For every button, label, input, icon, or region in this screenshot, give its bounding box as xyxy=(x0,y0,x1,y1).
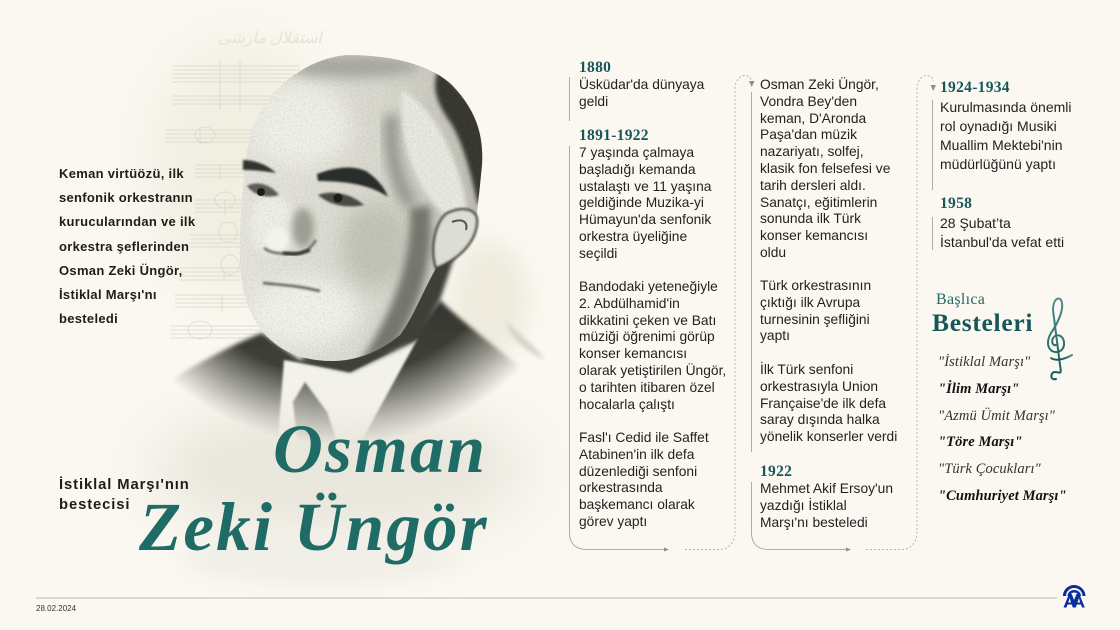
text: column 2 paragraph 1: sonunda ilk Türk xyxy=(760,211,861,226)
cheek shadow xyxy=(355,205,431,370)
suit xyxy=(176,298,518,439)
text: column 2 paragraph 3: saray dışında halka xyxy=(760,412,880,427)
text: column 2 paragraph 3: İlk Türk senfoni xyxy=(760,362,853,377)
text: 1958: İstanbul'da vefat etti xyxy=(940,234,1064,250)
intro text: orkestra şeflerinden xyxy=(59,239,189,254)
subtitle: İstiklal Marşı'nın xyxy=(59,477,190,493)
list of compositions: "İstiklal Marşı" xyxy=(938,354,1030,370)
timeline rules xyxy=(570,76,934,550)
nose xyxy=(292,208,314,248)
text: column 2 paragraph 1: Sanatçı, eğitimlerin xyxy=(760,195,877,210)
list of compositions: "Cumhuriyet Marşı" xyxy=(938,488,1067,504)
text: 1891-1922 paragraph 3: görev yaptı xyxy=(579,514,647,529)
text: column 2 paragraph 1 xyxy=(760,77,890,260)
text: column 2 paragraph 2 xyxy=(760,278,871,343)
list of compositions xyxy=(938,354,1067,504)
right eye xyxy=(318,193,364,206)
text: 1924-1934: Kurulmasında önemli xyxy=(940,99,1072,115)
list of compositions: "Türk Çocukları" xyxy=(938,461,1041,477)
text: 1880: Üsküdar'da dünyaya xyxy=(579,77,704,92)
text: column 2 paragraph 1: oldu xyxy=(760,245,786,260)
portrait figure xyxy=(176,55,518,441)
text: 1891-1922 paragraph 2: 2. Abdülhamid'in xyxy=(579,296,680,311)
text: 1880: geldi xyxy=(579,94,608,109)
intro text: kurucularından ve ilk xyxy=(59,214,195,229)
faded manuscript heading: اﺳﺘﻘﻼل ﻣﺎرﺷﻰ xyxy=(218,30,323,47)
text: 1924-1934: müdürlüğünü yaptı xyxy=(940,156,1056,172)
text: 1891-1922 paragraph 1 xyxy=(579,145,712,261)
date: 28.02.2024 xyxy=(36,604,76,613)
text: column 2 paragraph 1: nazariyatı, solfej, xyxy=(760,144,864,159)
dark hair xyxy=(435,70,490,205)
treble clef xyxy=(1048,298,1072,379)
year 1891-1922: 1891-1922 xyxy=(579,127,649,144)
text: 1891-1922 paragraph 2 xyxy=(579,279,726,412)
footer rule xyxy=(36,597,1057,599)
text: column 2 paragraph 1: konser kemancısı xyxy=(760,228,868,243)
face highlights xyxy=(250,83,350,167)
text: 1891-1922 paragraph 2: hocalarla çalıştı xyxy=(579,397,675,412)
text: column 2 paragraph 1: tarih dersleri aldı. xyxy=(760,178,866,193)
text: 1891-1922 paragraph 3: Fasl'ı Cedid ile Saffet xyxy=(579,430,709,445)
text: 1958: 28 Şubat’ta xyxy=(940,215,1011,231)
text: 1891-1922 paragraph 1: orkestra üyeliğine xyxy=(579,229,687,244)
text: 1891-1922 paragraph 1: Hümayun'da senfonik xyxy=(579,212,711,227)
text: 1891-1922 paragraph 2: Bandodaki yeteneğiyle xyxy=(579,279,718,294)
text: column 2 paragraph 3: orkestrasıyla Union xyxy=(760,379,878,394)
subtitle: bestecisi xyxy=(59,496,130,512)
text: 1891-1922 paragraph 2: müziği öğrenimi görüp xyxy=(579,329,715,344)
year 1958: 1958 xyxy=(940,195,972,212)
text: 1891-1922 paragraph 1: ustalaştı ve 11 yaşına xyxy=(579,179,711,194)
year 1880: 1880 xyxy=(579,59,611,76)
subtitle xyxy=(59,476,190,512)
text: 1958 xyxy=(940,215,1064,250)
shirt collar xyxy=(277,338,418,450)
right side smoke xyxy=(505,320,545,360)
list of compositions: "Azmü Ümit Marşı" xyxy=(938,408,1055,424)
AA logo xyxy=(1063,585,1086,608)
text: column 2 paragraph 1: Paşa'dan müzik xyxy=(760,127,857,142)
text: 1891-1922 paragraph 2: o tarihten itibaren özel xyxy=(579,380,715,395)
text: 1922: Marşı'nı besteledi xyxy=(760,515,868,530)
ear xyxy=(433,209,477,268)
text: column 2 paragraph 1: Osman Zeki Üngör, xyxy=(760,77,879,92)
heading: Besteleri: Besteleri xyxy=(932,308,1033,337)
year 1922: 1922 xyxy=(760,463,792,480)
neck shadow xyxy=(300,240,455,372)
arrowheads xyxy=(664,81,936,552)
text: 1891-1922 paragraph 1: 7 yaşında çalmaya xyxy=(579,145,694,160)
text: column 2 paragraph 3: yönelik konserler verdi xyxy=(760,429,897,444)
text: 1891-1922 paragraph 2: dikkatini çeken ve Batı xyxy=(579,313,716,328)
year 1924-1934: 1924-1934 xyxy=(940,79,1010,96)
text: 1922: Mehmet Akif Ersoy'un xyxy=(760,481,893,496)
intro text: Osman Zeki Üngör, xyxy=(59,263,183,278)
text: column 2 paragraph 2: çıktığı ilk Avrupa xyxy=(760,295,860,310)
text: 1880 xyxy=(579,77,704,109)
text: 1891-1922 paragraph 1: geldiğinde Muzika-yi xyxy=(579,195,704,210)
mouth xyxy=(263,283,320,291)
intro text: İstiklal Marşı'nı xyxy=(59,287,157,302)
title: first name: Osman xyxy=(273,411,487,487)
intro text xyxy=(59,166,195,326)
text: column 2 paragraph 1: keman, D'Aronda xyxy=(760,111,866,126)
text: column 2 paragraph 2: Türk orkestrasının xyxy=(760,278,871,293)
sheet music background xyxy=(165,60,300,339)
head xyxy=(240,55,482,361)
left eye xyxy=(247,183,279,196)
list of compositions: "Töre Marşı" xyxy=(938,434,1023,450)
text: 1891-1922 paragraph 3: düzenlediği senfoni xyxy=(579,464,697,479)
text: 1891-1922 paragraph 2: konser kemancısı xyxy=(579,346,687,361)
text: 1924-1934: Muallim Mektebi'nin xyxy=(940,137,1062,153)
text: 1924-1934 xyxy=(940,99,1072,172)
text: column 2 paragraph 3 xyxy=(760,362,897,444)
title: surname: Zeki Üngör xyxy=(139,489,489,565)
text: column 2 paragraph 1: Vondra Bey'den xyxy=(760,94,857,109)
text: 1891-1922 paragraph 2: olarak yetiştirilen Üngör, xyxy=(579,363,726,378)
left eyebrow xyxy=(243,160,276,173)
text: column 2 paragraph 2: yaptı xyxy=(760,328,790,343)
heading: Başlıca: Başlıca xyxy=(936,291,985,308)
list of compositions: "İlim Marşı" xyxy=(938,381,1019,397)
text: 1891-1922 paragraph 3: başkemancı olarak xyxy=(579,497,695,512)
text: 1922: yazdığı İstiklal xyxy=(760,498,847,513)
text: 1891-1922 paragraph 1: seçildi xyxy=(579,246,617,261)
text: 1891-1922 paragraph 3 xyxy=(579,430,709,529)
text: 1891-1922 paragraph 3: Atabinen'in ilk defa xyxy=(579,447,694,462)
intro text: Keman virtüözü, ilk xyxy=(59,166,184,181)
intro text: besteledi xyxy=(59,311,118,326)
text: column 2 paragraph 2: turnesinin şefliğini xyxy=(760,312,870,327)
intro text: senfonik orkestranın xyxy=(59,190,193,205)
text: column 2 paragraph 3: Française'de ilk defa xyxy=(760,396,886,411)
silver hair xyxy=(401,90,467,228)
text: column 2 paragraph 1: klasik fon felsefesi ve xyxy=(760,161,890,176)
text: 1924-1934: rol oynadığı Musiki xyxy=(940,118,1057,134)
text: 1922 xyxy=(760,481,893,530)
right eyebrow xyxy=(317,167,388,197)
text: 1891-1922 paragraph 1: başladığı kemanda xyxy=(579,162,696,177)
tie xyxy=(292,381,336,441)
text: 1891-1922 paragraph 3: orkestrasında xyxy=(579,480,663,495)
skin grain xyxy=(240,56,482,361)
